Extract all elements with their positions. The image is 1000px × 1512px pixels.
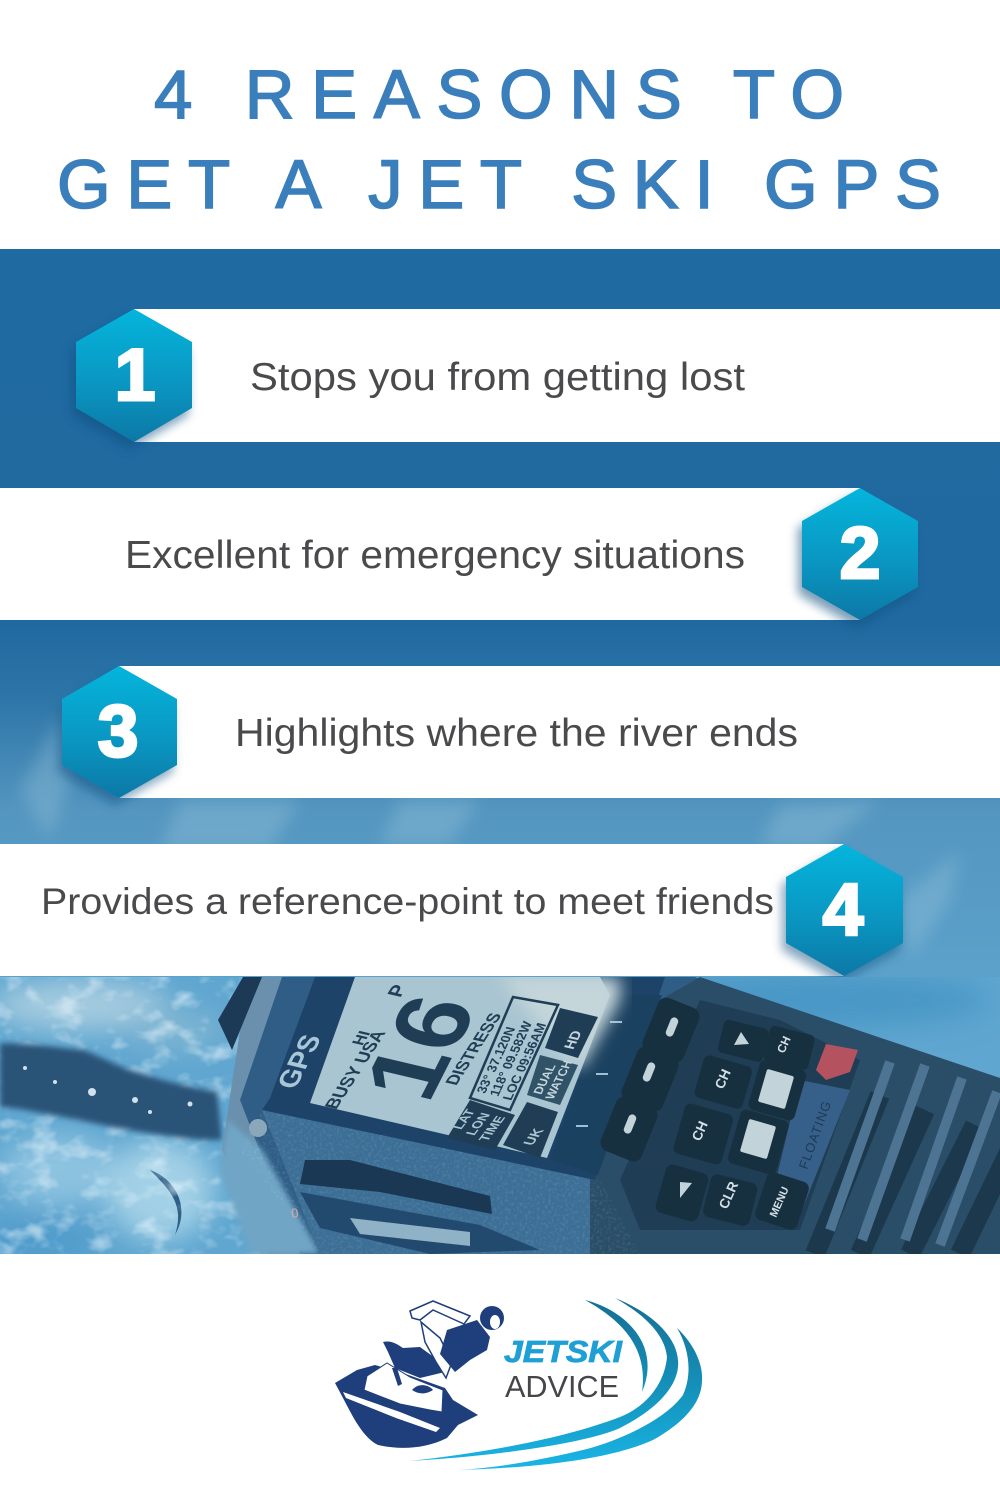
side ticks: [576, 1021, 622, 1127]
dark water streak: [0, 1043, 222, 1140]
small readouts: [320, 983, 549, 1111]
screen bezel: [262, 977, 665, 1180]
logo swooshes: [410, 1298, 702, 1470]
icon: hexagon 2: [798, 488, 918, 627]
water: [0, 972, 1000, 1262]
red distress key: [816, 1044, 858, 1080]
small readouts: P: [383, 983, 412, 999]
ribbon 1: [134, 309, 1000, 442]
small readouts: LOC 09:56AM: [499, 1021, 549, 1102]
rider arm: [410, 1301, 470, 1324]
key labels: [689, 1034, 794, 1219]
text: reason 4: Provides a reference-point to meet friends: [41, 881, 774, 922]
screw and power mark: [249, 1119, 267, 1137]
dual watch box: [527, 1055, 578, 1105]
icon: hexagon 3: 3: [98, 691, 138, 772]
text: reason 1: Stops you from getting lost: [250, 356, 745, 399]
deck: [364, 1363, 443, 1412]
dual watch box: DUAL: [530, 1063, 559, 1096]
HD box: [545, 1008, 598, 1058]
photo: GPS radio in water: [0, 972, 1000, 1262]
logo wordmark: JETSKI: [504, 1334, 624, 1369]
floating label: FLOATING: [796, 1098, 834, 1171]
ribbon 4: [0, 844, 844, 976]
dark box LAT LON TIME: TIME: [475, 1114, 509, 1143]
panel: reason 3: [58, 666, 1000, 805]
panel: reason 2: [0, 488, 918, 627]
title: [57, 56, 941, 223]
seat and handlebar: [383, 1342, 445, 1378]
GPS label: GPS: [271, 1032, 327, 1091]
dark box LAT LON TIME: LON: [462, 1111, 493, 1137]
small readouts: 33° 37.120N: [473, 1025, 518, 1095]
text: reason 2: Excellent for emergency situations: [125, 534, 745, 577]
icon: hexagon 4: 4: [823, 870, 864, 951]
key labels: CLR: [716, 1179, 741, 1211]
key labels: CH: [712, 1067, 734, 1091]
icon: hexagon 1: [72, 309, 192, 449]
small readouts: HI: [349, 1030, 375, 1047]
rider torso: [440, 1320, 490, 1372]
key labels: MENU: [768, 1185, 792, 1219]
key labels: CH: [774, 1034, 794, 1055]
HD box: HD: [560, 1029, 585, 1051]
speaker grille: [815, 1062, 1000, 1254]
dark box LAT LON TIME: [447, 1100, 515, 1150]
background panel: [0, 249, 1000, 977]
title: 4 REASONS TO: [154, 56, 844, 133]
icon: hexagon 3: [58, 666, 177, 805]
title: GET A JET SKI GPS: [57, 146, 941, 223]
logo: [335, 1298, 702, 1470]
text: reason 3: Highlights where the river ends: [235, 712, 798, 755]
radio body: 0: [290, 1205, 300, 1221]
slit: [300, 1160, 492, 1214]
key labels: CH: [689, 1119, 711, 1143]
panel: reason 4: [0, 844, 903, 983]
icon: hexagon 2: 2: [840, 513, 880, 594]
ribbon 2: [0, 488, 860, 620]
radio body: [218, 977, 1000, 1254]
icon: hexagon 1: 1: [115, 335, 155, 416]
rider head: [480, 1306, 504, 1330]
ribbon 3: [119, 666, 1000, 798]
hull: [335, 1365, 478, 1448]
logo: ADVICE: [505, 1369, 619, 1404]
screen LCD: [310, 977, 620, 1158]
antenna clip: [218, 977, 262, 1050]
dark box LAT LON TIME: LAT: [449, 1108, 479, 1131]
UK box: [503, 1102, 558, 1158]
rider legs: [421, 1322, 452, 1378]
panel: reason 1: [72, 309, 1000, 449]
radio keys: [598, 995, 858, 1232]
small readouts: 118° 09.582W: [486, 1019, 536, 1098]
UK box: UK: [519, 1127, 547, 1147]
icon: hexagon 4: [782, 844, 903, 983]
dual watch box: WATCH: [542, 1059, 575, 1101]
readout box outline: [470, 997, 558, 1110]
small readouts: BUSY USA: [320, 1029, 390, 1111]
channel number: 16: [341, 985, 499, 1110]
small readouts: DISTRESS: [441, 1011, 506, 1087]
logo jet ski and rider: [335, 1301, 504, 1448]
